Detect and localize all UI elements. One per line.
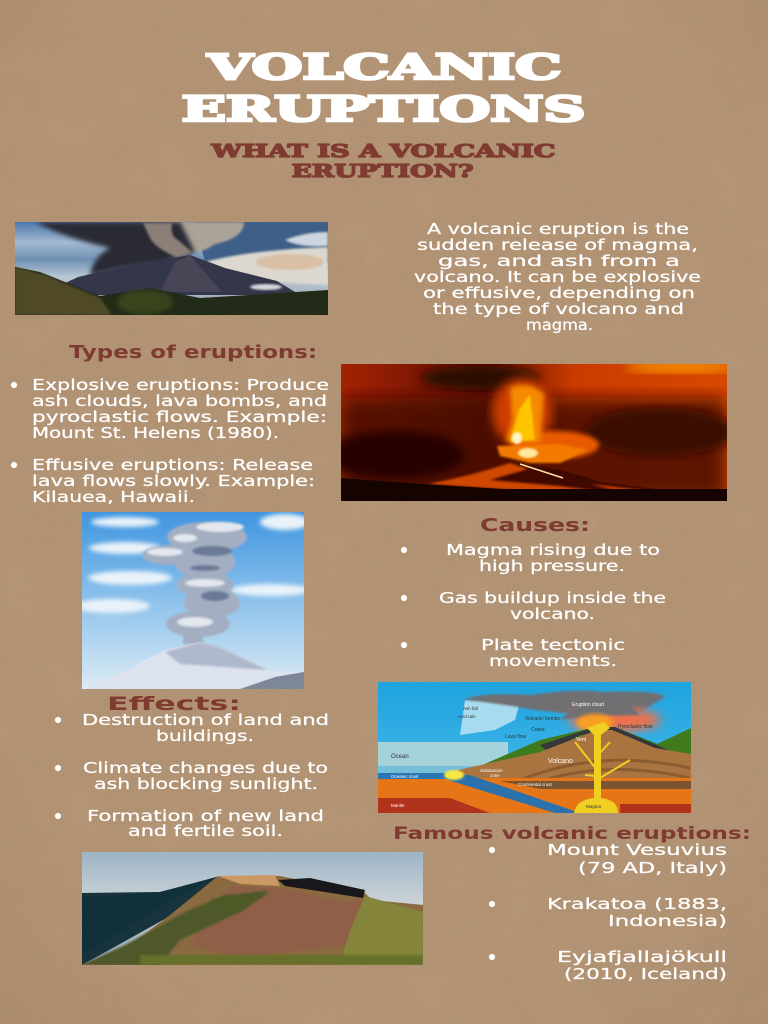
list: types of eruptions: Mount St. Helens (1980). — [32, 424, 279, 442]
paragraph: definition: volcano. It can be explosive — [414, 268, 701, 286]
list: causes: high pressure. — [479, 557, 625, 575]
list: famous eruptions: Krakatoa (1883, — [547, 895, 727, 913]
list: effects: Destruction of land and — [82, 711, 329, 729]
list: effects — [55, 711, 329, 840]
list: effects: Climate changes due to — [83, 759, 328, 777]
list: famous eruptions: Indonesia) — [608, 912, 727, 930]
list: famous eruptions: Eyjafjallajökull — [557, 948, 727, 966]
list: causes: Plate tectonic — [481, 636, 625, 654]
list: famous eruptions: (2010, Iceland) — [564, 965, 727, 983]
photo: erupting volcano with ash cloud — [15, 222, 328, 315]
photo: lava eruption at night — [325, 361, 735, 501]
diagram: volcano cross-section: Crater — [531, 727, 545, 733]
diagram: volcano cross-section: Magma — [586, 804, 602, 809]
diagram: volcano cross-section — [378, 682, 691, 813]
photo: ash plume over snowy volcano — [74, 512, 310, 689]
paragraph: definition: or effusive, depending on — [423, 284, 695, 302]
diagram: volcano cross-section: Ash fall — [463, 706, 478, 711]
title — [182, 47, 586, 130]
paragraph: definition: magma. — [526, 316, 593, 334]
paragraph: definition: the type of volcano and — [433, 300, 684, 318]
list: causes: Gas buildup inside the — [439, 589, 666, 607]
list: effects: ash blocking sunlight. — [94, 775, 318, 793]
list: causes: volcano. — [510, 605, 595, 623]
list: effects: and fertile soil. — [128, 822, 283, 840]
title: VOLCANIC — [206, 47, 562, 88]
list: causes: Magma rising due to — [446, 541, 660, 559]
list: types of eruptions: Effusive eruptions: Release — [32, 456, 313, 474]
heading: effects: Effects: — [107, 693, 241, 715]
diagram: volcano cross-section: Continental crust — [518, 782, 553, 787]
diagram: volcano cross-section: Lava flow — [505, 734, 527, 740]
list: types of eruptions: Explosive eruptions: Produce — [32, 376, 329, 394]
heading: causes: Causes: — [480, 515, 590, 536]
diagram: volcano cross-section: Pyroclastic flow — [618, 724, 653, 730]
paragraph: definition: gas, and ash from a — [438, 252, 680, 270]
subtitle: ERUPTION? — [292, 161, 474, 182]
diagram: volcano cross-section: Vent — [576, 737, 587, 743]
diagram: volcano cross-section: Volcanic bombs — [525, 716, 561, 722]
list: types of eruptions: ash clouds, lava bombs, and — [32, 392, 327, 410]
paragraph: definition: A volcanic eruption is the — [427, 220, 689, 238]
diagram: volcano cross-section: Subduction — [480, 768, 503, 773]
list: effects: buildings. — [156, 727, 254, 745]
list: famous eruptions — [489, 841, 727, 983]
diagram: volcano cross-section: Acid rain — [458, 714, 476, 719]
diagram: volcano cross-section: zone — [490, 773, 500, 778]
diagram: volcano cross-section: Eruption cloud — [572, 702, 604, 708]
list: types of eruptions: lava flows slowly. Example: — [32, 472, 315, 490]
list: types of eruptions — [11, 376, 329, 506]
list: causes: movements. — [489, 652, 617, 670]
subtitle — [210, 141, 556, 182]
diagram: volcano cross-section: Mantle — [391, 803, 405, 808]
heading: famous volcanic eruptions: Famous volcanic eruptions: — [393, 824, 751, 844]
diagram: volcano cross-section: Volcano — [548, 758, 573, 765]
paragraph: definition: sudden release of magma, — [417, 236, 698, 254]
list: types of eruptions: Kilauea, Hawaii. — [32, 488, 195, 506]
diagram: volcano cross-section: Oceanic crust — [391, 774, 419, 779]
list: famous eruptions: Mount Vesuvius — [547, 841, 727, 859]
title: ERUPTIONS — [182, 89, 586, 130]
paragraph: definition — [414, 220, 701, 334]
diagram: volcano cross-section: Ocean — [391, 754, 409, 760]
list: causes — [401, 541, 666, 670]
subtitle: WHAT IS A VOLCANIC — [210, 141, 556, 162]
list: famous eruptions: (79 AD, Italy) — [578, 859, 727, 877]
list: types of eruptions: pyroclastic flows. Example: — [32, 408, 327, 426]
list: effects: Formation of new land — [87, 807, 324, 825]
heading: types of eruptions: Types of eruptions: — [69, 342, 317, 363]
photo: aerial view of crater — [82, 852, 423, 965]
